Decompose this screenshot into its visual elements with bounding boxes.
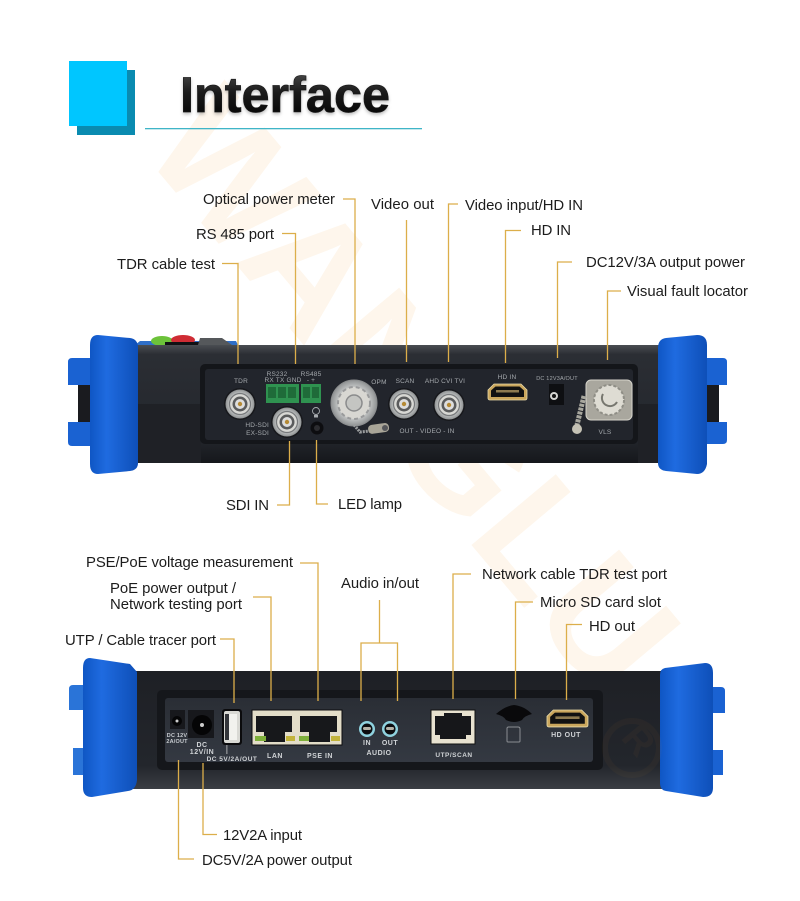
labels: bottom device: DC5V/2A power output: [202, 853, 353, 869]
LAN and PSE ports: [252, 710, 342, 760]
title underline: [145, 128, 422, 129]
terminal block: RX TX GND: [264, 377, 302, 384]
DC small jack: [166, 710, 188, 745]
terminal block: RS485: [301, 371, 322, 378]
labels: bottom device: [65, 555, 668, 869]
SDI port: EX-SDI: [246, 430, 269, 437]
DC 12V output jack: DC 12V3A/OUT: [536, 376, 578, 382]
labels: bottom device: UTP / Cable tracer port: [65, 633, 217, 649]
labels: top device: SDI IN: [226, 498, 269, 514]
video caption: OUT - VIDEO - IN: [399, 428, 455, 435]
USB port: [222, 709, 242, 754]
DC 12V output jack: [536, 376, 578, 405]
AHD CVI TVI port: AHD CVI TVI: [425, 378, 465, 385]
LAN and PSE ports: LAN: [267, 753, 283, 760]
device: bottom panel: [69, 658, 725, 797]
labels: bottom device: Audio in/out: [341, 576, 420, 592]
labels: top device: LED lamp: [338, 497, 402, 513]
leader lines: bottom device: [178, 563, 582, 859]
body: [130, 671, 665, 789]
labels: top device: Optical power meter: [203, 192, 335, 208]
VLS port: [572, 380, 632, 436]
left bumper: [90, 335, 138, 474]
AHD CVI TVI port: [425, 378, 465, 421]
labels: top device: Video out: [371, 197, 435, 213]
labels: top device: TDR cable test: [117, 257, 216, 273]
right bumper tabs: [705, 358, 727, 444]
port panel: [157, 690, 603, 770]
DC small jack: DC 12V: [167, 733, 187, 739]
watermark: WANGLU: [114, 57, 714, 723]
TDR port: TDR: [234, 378, 248, 385]
labels: top device: RS 485 port: [196, 227, 275, 243]
title block: [69, 61, 422, 135]
labels: bottom device: 12V2A input: [223, 828, 303, 844]
labels: top device: [117, 192, 748, 514]
labels: bottom device: Network cable TDR test port: [482, 567, 668, 583]
DC large jack: 12V/IN: [190, 749, 214, 756]
audio ports: AUDIO: [366, 750, 392, 757]
right bumper: [660, 663, 713, 797]
labels: bottom device: Micro SD card slot: [540, 595, 662, 611]
audio ports: [359, 721, 398, 757]
labels: top device: Video input/HD IN: [465, 198, 583, 214]
labels: bottom device: HD out: [589, 619, 636, 635]
DC large jack: [188, 710, 214, 756]
left bumper tabs: [68, 358, 90, 446]
watermark registered mark: R: [613, 717, 663, 765]
LED lamp: [310, 408, 324, 434]
audio ports: OUT: [382, 740, 398, 747]
DC small jack: 2A/OUT: [166, 739, 188, 745]
audio ports: IN: [363, 740, 371, 747]
OPM port: [331, 379, 390, 434]
UTP/SCAN port: UTP/SCAN: [435, 752, 473, 759]
labels: bottom device: Network testing port: [110, 597, 243, 613]
USB caption: DC 5V/2A/OUT: [207, 756, 257, 763]
HD OUT port: HD OUT: [551, 732, 581, 739]
HD IN port: HD IN: [498, 374, 516, 381]
HD IN port: [488, 374, 527, 400]
terminal block: - +: [307, 377, 315, 384]
labels: bottom device: PSE/PoE voltage measurement: [86, 555, 294, 571]
terminal block: [264, 371, 322, 403]
DC large jack: DC: [196, 742, 208, 749]
body: [136, 345, 660, 463]
labels: top device: DC12V/3A output power: [586, 255, 745, 271]
SCAN port: SCAN: [396, 378, 415, 385]
SDI port: [245, 406, 303, 438]
micro SD slot: [496, 705, 532, 742]
SCAN port: [388, 378, 420, 420]
terminal block: RS232: [267, 371, 288, 378]
SDI port: HD-SDI: [245, 422, 269, 429]
right bumper tabs: [712, 687, 725, 775]
labels: top device: Visual fault locator: [627, 284, 748, 300]
OPM port: OPM: [371, 379, 387, 386]
left bumper tabs: [69, 685, 84, 775]
VLS port: VLS: [599, 429, 612, 436]
port panel: [200, 364, 638, 444]
HD OUT port: [547, 710, 588, 739]
TDR port: [224, 378, 256, 420]
icon: title squares: [69, 61, 135, 135]
top buttons: [135, 335, 238, 346]
left bumper: [83, 658, 137, 797]
device: top panel: [68, 335, 727, 474]
labels: bottom device: PoE power output /: [110, 581, 237, 597]
LAN and PSE ports: PSE IN: [307, 753, 333, 760]
labels: top device: HD IN: [531, 223, 571, 239]
title: Interface: [180, 67, 390, 123]
right bumper: [658, 335, 707, 474]
UTP/SCAN port: [431, 710, 475, 759]
leader lines: top device: [222, 199, 621, 505]
